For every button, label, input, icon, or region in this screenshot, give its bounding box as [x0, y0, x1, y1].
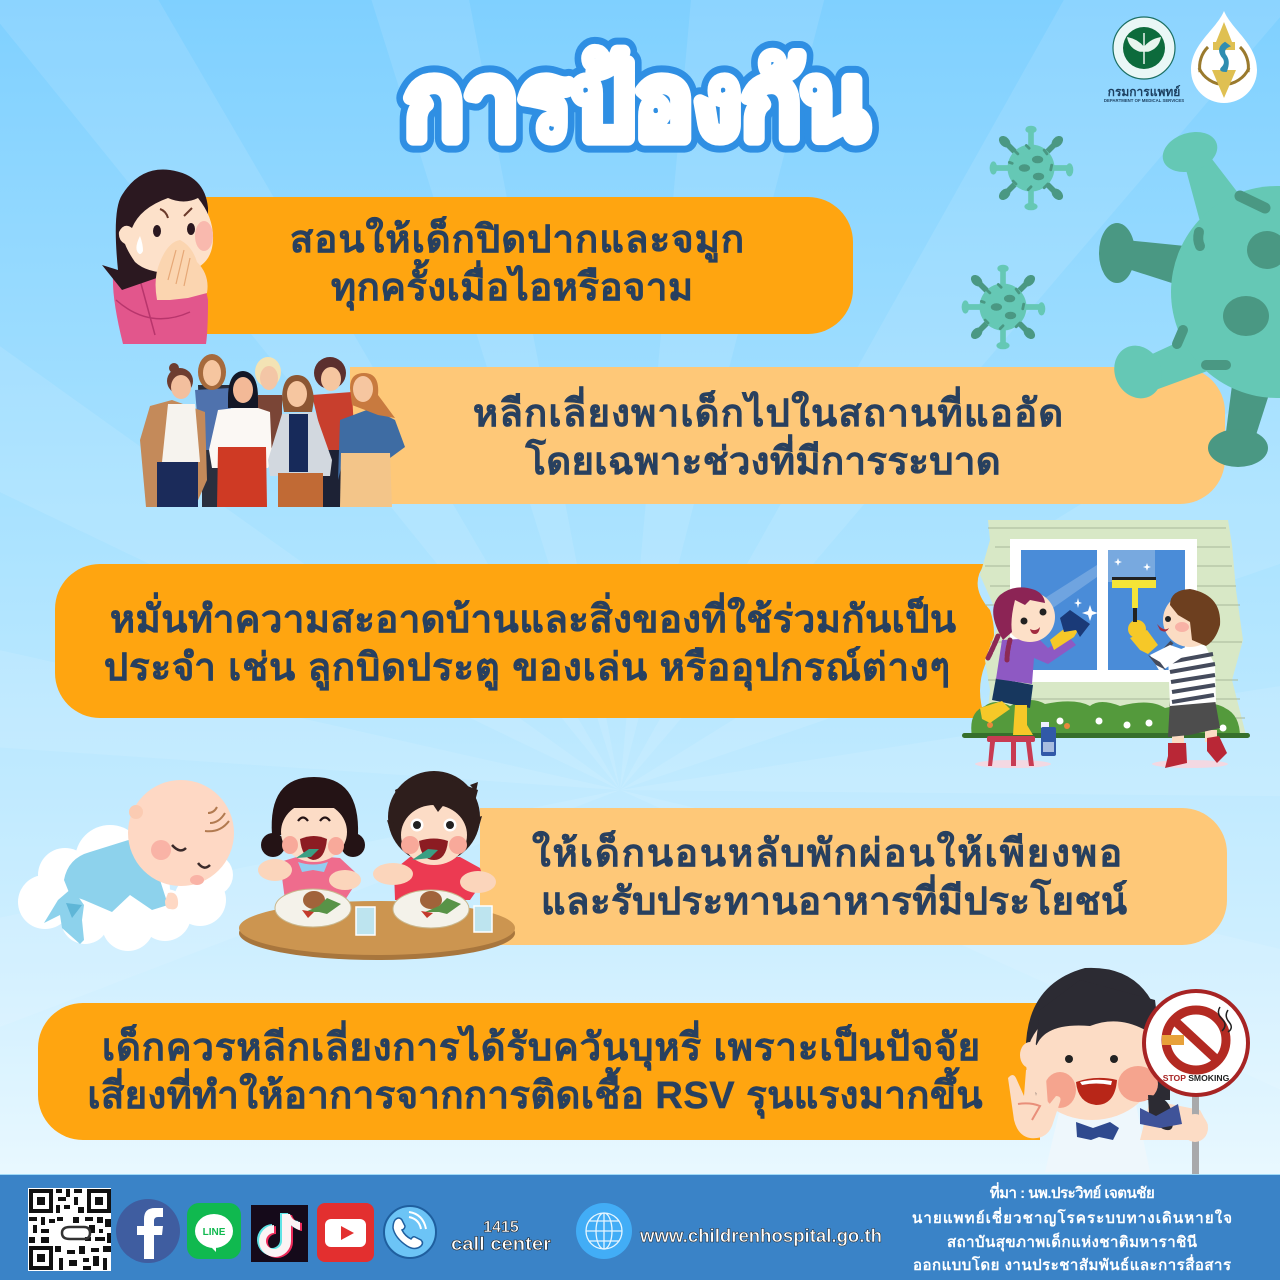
source credits — [912, 1182, 1232, 1274]
panel: orange bar 3 — [55, 564, 994, 718]
text: clean house and shared objects: หมั่นทำความสะอาดบ้านและสิ่งของที่ใช้ร่วมกันเป็น — [110, 592, 956, 641]
text: avoid crowded places: หลีกเลี่ยงพาเด็กไปในสถานที่แออัด — [473, 386, 1063, 435]
call center text: 1415 — [483, 1219, 519, 1236]
bushes — [962, 700, 1250, 738]
icon: youtube — [317, 1203, 374, 1262]
panel: light orange bar 4 — [480, 808, 1227, 945]
icon: group of people — [140, 354, 405, 507]
text: avoid cigarette smoke: เด็กควรหลีกเลี่ยงการได้รับควันบุหรี่ เพราะเป็นปัจจัย — [102, 1020, 980, 1071]
text: cover mouth — [290, 216, 744, 311]
panel: footer bar — [0, 1174, 1280, 1280]
qr code — [28, 1188, 111, 1271]
panel: orange bar 1 — [195, 197, 853, 334]
panel: orange bar 5 — [38, 1003, 1040, 1140]
cloud — [18, 825, 233, 951]
text: sleep and food — [532, 830, 1127, 923]
source credits: ที่มา : นพ.ประวิทย์ เจตนชัย — [990, 1182, 1155, 1202]
icon: sleeping baby on cloud — [18, 780, 234, 951]
text: avoid cigarette smoke: เสี่ยงที่ทำให้อาการจากการติดเชื้อ RSV รุนแรงมากขึ้น — [88, 1067, 983, 1119]
panel: light orange bar 2 — [350, 367, 1225, 504]
icon: girl holding stop smoking sign — [1008, 968, 1248, 1175]
icon: line: LINE — [203, 1227, 226, 1238]
icon: children eating at a table — [239, 771, 515, 960]
title: การป้องกัน — [404, 45, 868, 161]
website url: www.childrenhospital.go.th — [639, 1226, 882, 1246]
icon: tiktok — [251, 1205, 308, 1262]
text: clean house and shared objects — [104, 592, 956, 691]
text: sleep and food: และรับประทานอาหารที่มีประโยชน์ — [541, 874, 1127, 923]
table — [239, 901, 515, 960]
raised hand — [1008, 1068, 1060, 1138]
wall siding — [980, 520, 1246, 735]
source credits: ออกแบบโดย งานประชาสัมพันธ์และการสื่อสาร — [913, 1254, 1232, 1274]
logo: department of medical services: กรมการแพทย์ — [1108, 85, 1180, 99]
logo: department of medical services — [1104, 17, 1184, 103]
icon: facebook — [116, 1199, 180, 1263]
text: avoid crowded places: โดยเฉพาะช่วงที่มีการระบาด — [524, 434, 1000, 483]
text: cover mouth: สอนให้เด็กปิดปากและจมูก — [290, 216, 744, 263]
small virus lower — [962, 265, 1045, 349]
icon: girl covering her mouth — [102, 170, 213, 344]
boy with squeegee — [1112, 577, 1228, 768]
text: sleep and food: ให้เด็กนอนหลับพักผ่อนให้เพียงพอ — [532, 830, 1122, 875]
baby suit — [44, 838, 168, 944]
text: avoid cigarette smoke — [88, 1020, 983, 1119]
text: cover mouth: ทุกครั้งเมื่อไอหรือจาม — [331, 259, 693, 311]
call center text: call center — [451, 1234, 551, 1254]
logo: teardrop emblem — [1191, 11, 1257, 103]
icon: children cleaning window — [962, 520, 1250, 768]
plates and glasses — [275, 889, 492, 935]
girl with sponge — [980, 587, 1090, 735]
icon: big virus — [1099, 125, 1280, 467]
title: การป้องกัน — [404, 45, 868, 161]
icon: phone — [384, 1206, 436, 1258]
girl eating — [258, 777, 365, 900]
window — [1010, 539, 1197, 682]
text: avoid crowded places — [473, 386, 1063, 483]
stool and spray — [975, 722, 1056, 768]
boy eating — [373, 771, 496, 900]
text: clean house and shared objects: ประจำ เช่น ลูกบิดประตู ของเล่น หรืออุปกรณ์ต่างๆ — [104, 646, 950, 691]
icon: girl holding stop smoking sign: STOP SMOKING — [1163, 1073, 1230, 1083]
small virus top — [990, 126, 1073, 210]
source credits: สถาบันสุขภาพเด็กแห่งชาติมหาราชินี — [947, 1232, 1198, 1252]
icon: globe — [576, 1203, 632, 1259]
logo: department of medical services: DEPARTMENT OF MEDICAL SERVICES — [1104, 98, 1184, 103]
call center text — [451, 1219, 551, 1254]
source credits: นายแพทย์เชี่ยวชาญโรคระบบทางเดินหายใจ — [912, 1207, 1232, 1227]
icon: line — [187, 1203, 241, 1259]
